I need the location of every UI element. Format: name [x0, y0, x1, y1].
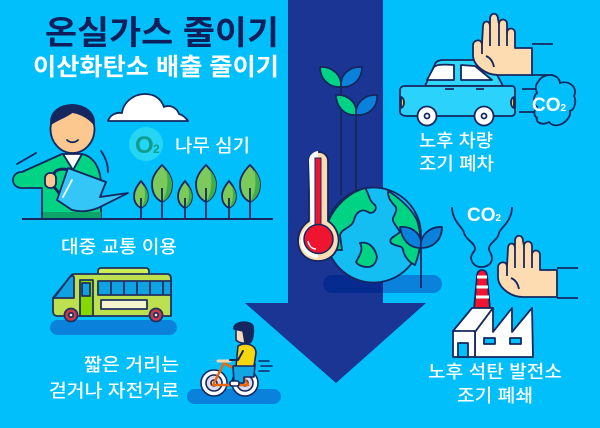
small sprout on globe: [400, 227, 442, 288]
bus: [53, 268, 171, 322]
person watering: [13, 105, 128, 219]
bus body: [53, 274, 171, 316]
label: retire old vehicles: 조기 폐차: [419, 154, 494, 174]
CO2 label: factory: CO2: [467, 205, 502, 226]
head: [50, 105, 94, 153]
title: 온실가스 줄이기: [45, 14, 279, 51]
trees: [22, 165, 273, 219]
roof and windows: [425, 60, 503, 86]
label: tree planting: 나무 심기: [175, 136, 250, 156]
car body: [400, 86, 515, 116]
speed lines: [259, 361, 272, 371]
side panel: [101, 300, 147, 309]
side windows: [98, 281, 171, 295]
torso: [236, 344, 256, 366]
legs: [233, 364, 255, 383]
icon: oxygen: [129, 127, 163, 161]
bus shadow: [50, 320, 177, 335]
tree 5: [222, 181, 236, 219]
watering can: [57, 168, 128, 211]
hand: stop car: [473, 14, 553, 75]
roof left: [453, 308, 493, 332]
hand: [45, 173, 56, 188]
tree 3: [178, 181, 192, 219]
cloud: [108, 94, 188, 121]
icon: oxygen: O: [135, 132, 154, 159]
tree 2: [152, 165, 172, 219]
front window: [54, 276, 74, 298]
tree 6: [240, 165, 260, 219]
icon: oxygen: 2: [153, 142, 160, 156]
ground line: [22, 218, 273, 220]
plants: [320, 67, 377, 195]
label: walk or cycle: 짧은 거리는: [84, 355, 179, 375]
smoke outline: [452, 207, 512, 267]
exhaust lines: [519, 89, 538, 112]
shirt: [63, 154, 82, 170]
building: [475, 308, 533, 357]
motion lines: [17, 151, 108, 172]
cyclist shadow: [187, 389, 281, 404]
windows: [484, 338, 495, 344]
CO2 cloud: car: CO2: [532, 95, 566, 116]
label: retire old vehicles: 노후 차량: [419, 131, 493, 151]
tree 1: [134, 181, 148, 219]
hair: [51, 105, 94, 124]
roof unit: [98, 268, 149, 277]
body: [13, 154, 101, 219]
cyclist: [201, 322, 272, 396]
can handle: [54, 169, 72, 197]
head: [236, 328, 250, 343]
wheels: [201, 370, 227, 396]
hand: stop factory: [498, 236, 578, 298]
plant shadow: [323, 275, 442, 293]
thermometer: [298, 151, 339, 261]
wheels: [64, 308, 78, 322]
subtitle: 이산화탄소 배출 줄이기: [33, 54, 279, 81]
tree 4: [196, 165, 216, 219]
label: walk or cycle: 걷거나 자전거로: [49, 381, 179, 401]
car: [400, 60, 538, 126]
foot: [230, 381, 239, 386]
label: walk or cycle: [49, 355, 179, 401]
label: retire coal plants: 조기 폐쇄: [457, 386, 533, 406]
hair: [234, 322, 253, 343]
headlights: [401, 97, 404, 108]
label: retire old vehicles: [419, 131, 494, 174]
factory: [453, 270, 533, 357]
front wall: [453, 331, 475, 357]
CO2 cloud: car: [532, 75, 575, 125]
chimney: [474, 270, 490, 309]
label: retire coal plants: [428, 362, 562, 406]
wheels: [418, 106, 436, 126]
door: [458, 343, 468, 357]
frame: [213, 361, 248, 385]
label: public transport: 대중 교통 이용: [61, 237, 177, 257]
door: [80, 280, 93, 316]
label: retire coal plants: 노후 석탄 발전소: [428, 362, 562, 382]
globe: [326, 188, 421, 282]
arrow: downward reduction: [245, 0, 426, 383]
